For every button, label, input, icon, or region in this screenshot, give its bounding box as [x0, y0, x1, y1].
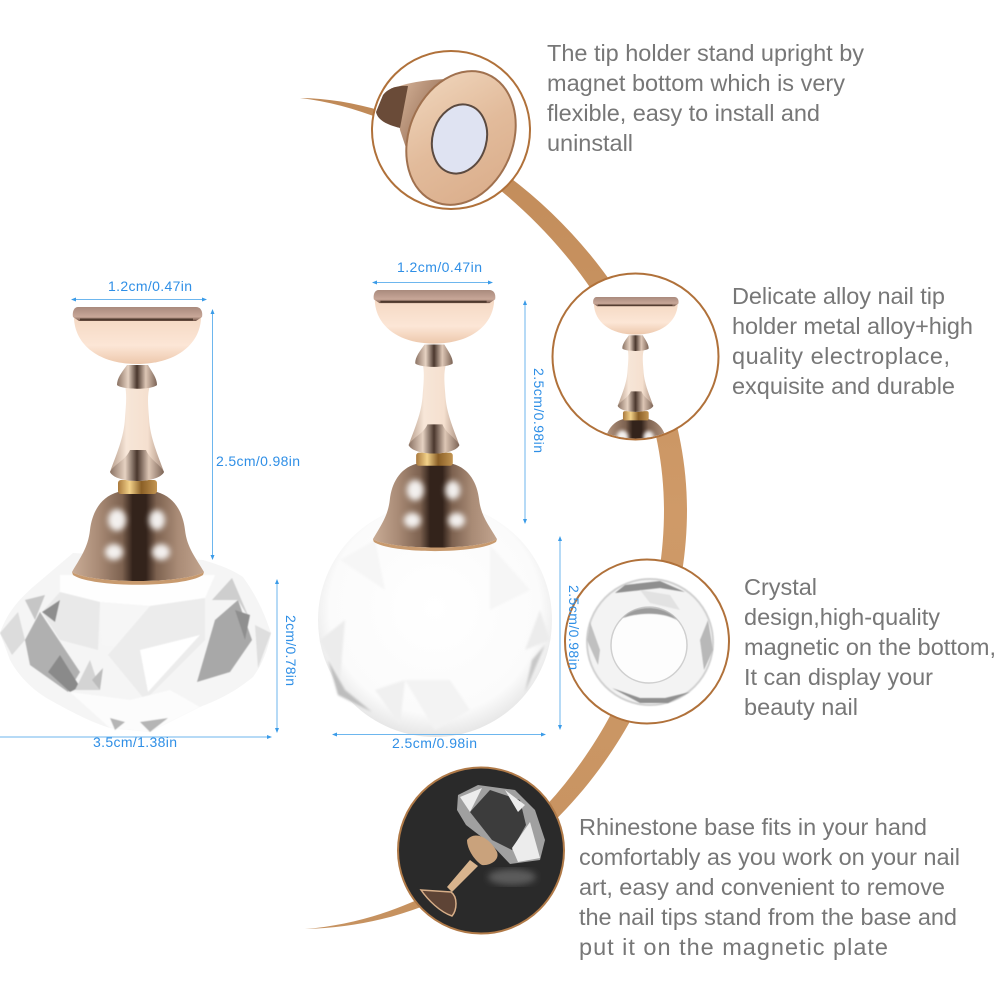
diamond dark facet [470, 790, 526, 850]
diamond bright facets [460, 788, 540, 862]
diamond crystal facets [0, 575, 271, 732]
text block: crystal: design,high-quality [744, 604, 940, 630]
inner ring [611, 607, 687, 683]
text block: magnet bottom: flexible, easy to install and [547, 100, 820, 126]
ball facets [320, 540, 550, 730]
text block: magnet bottom: The tip holder stand upright by [547, 40, 864, 66]
middle stand with round crystal base [318, 290, 552, 737]
metal holder [373, 290, 497, 551]
crystal width: 2.5cm/0.98in [392, 735, 477, 751]
circle frame [372, 51, 530, 209]
decorative arc connecting callouts [300, 98, 687, 929]
text block: alloy: Delicate alloy nail tip [732, 283, 945, 309]
crystal top view [587, 579, 713, 705]
reflection [488, 869, 536, 885]
text block: alloy: holder metal alloy+high [732, 313, 973, 339]
text block: crystal: Crystal [744, 574, 817, 600]
bell back [395, 79, 445, 175]
dimensions: left stand [0, 278, 300, 750]
top width [372, 259, 493, 284]
holder height: 2.5cm/0.98in [216, 453, 300, 469]
text block: crystal: It can display your [744, 664, 933, 690]
text block: magnet bottom: uninstall [547, 130, 633, 156]
text block: crystal: beauty nail [744, 694, 858, 720]
callout circle: crystal bottom [565, 560, 729, 724]
top width: 1.2cm/0.47in [397, 259, 482, 275]
holder height: 2.5cm/0.98in [531, 368, 547, 453]
magnet [424, 98, 495, 180]
text block: alloy: quality electroplace, [732, 343, 950, 369]
text block: crystal: magnetic on the bottom, [744, 634, 996, 660]
text block: alloy: exquisite and durable [732, 373, 955, 399]
crystal height: 2cm/0.78in [283, 615, 299, 686]
circle frame [565, 560, 729, 724]
dark knob [376, 86, 408, 128]
round crystal ball [318, 503, 552, 737]
disc [387, 55, 535, 221]
crystal height [275, 579, 299, 733]
crystal height: 2.5cm/0.98in [566, 585, 582, 670]
text block: rhinestone base: comfortably as you work on your nail [579, 844, 960, 870]
callout circle: alloy holder [552, 272, 720, 440]
circle frame [552, 274, 718, 440]
text block: rhinestone base: art, easy and convenient to remove [579, 874, 945, 900]
rim facets [587, 581, 713, 703]
holder height [210, 309, 300, 560]
callout circle: magnet bottom [372, 51, 535, 221]
crystal height [558, 536, 582, 730]
crystal width [0, 734, 272, 750]
diamond [457, 785, 545, 864]
diamond crystal outline [0, 553, 271, 732]
crystal width: 3.5cm/1.38in [93, 734, 177, 750]
top width: 1.2cm/0.47in [108, 278, 192, 294]
crystal width [332, 732, 546, 751]
top width [71, 278, 207, 302]
text block: magnet bottom: magnet bottom which is very [547, 70, 845, 96]
dark photo circle [398, 768, 564, 934]
text block: rhinestone base: Rhinestone base fits in your hand [579, 814, 927, 840]
inner shadow [623, 608, 677, 620]
metal holder [72, 307, 204, 585]
dimensions: middle stand [332, 259, 582, 751]
text block: rhinestone base: put it on the magnetic plate [579, 934, 888, 960]
callout circle: photo on dark background [398, 768, 564, 934]
mini stand [593, 297, 679, 438]
left stand with diamond crystal base [0, 307, 271, 732]
gold stand [421, 836, 498, 916]
holder height [523, 300, 547, 524]
text block: rhinestone base: the nail tips stand from the base and [579, 904, 957, 930]
